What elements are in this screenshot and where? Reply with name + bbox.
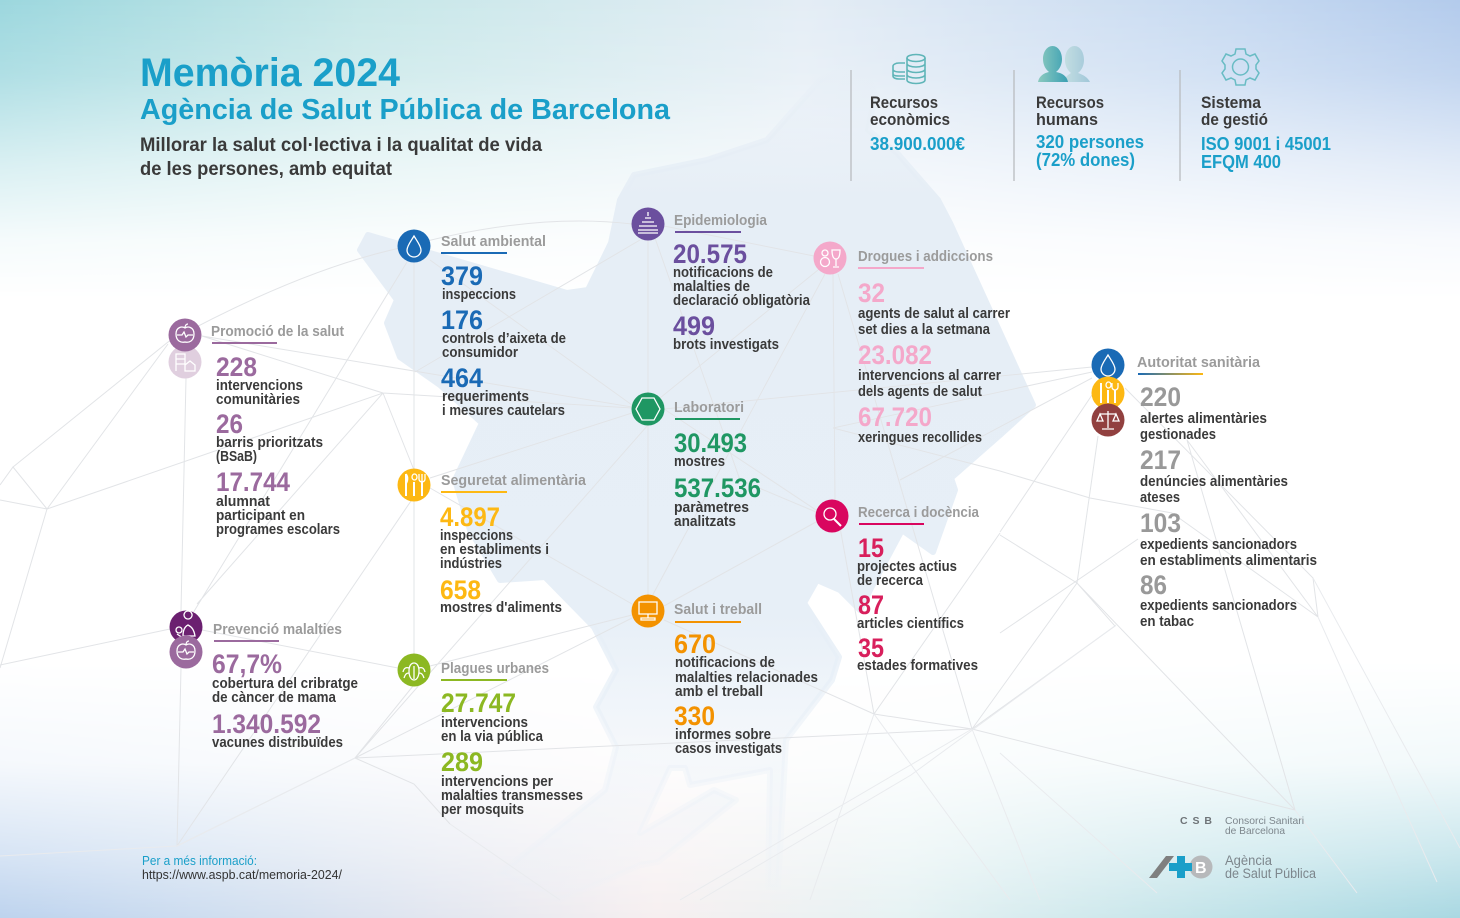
stat: 217: [1140, 445, 1288, 506]
stat: 220: 220: [1140, 382, 1181, 412]
stat: 87: articles científics: [857, 616, 964, 632]
icon: magnifier: [816, 500, 848, 532]
stat: 67.720: 67.720: [858, 402, 932, 432]
stat: 103: en establiments alimentaris: [1140, 553, 1317, 569]
icon: water drop: [398, 230, 430, 262]
mission statement: de les persones, amb equitat: [140, 158, 392, 180]
stat: 289: malalties transmesses: [441, 788, 583, 804]
stat: 23.082: dels agents de salut: [858, 384, 982, 400]
stat: 499: 499: [673, 311, 715, 341]
stat: 658: [440, 575, 562, 616]
panel: Seguretat alimentària: [398, 468, 587, 616]
heading: Recerca i docència: [858, 505, 980, 521]
mission statement: Millorar la salut col·lectiva i la qualitat de vida: [140, 134, 542, 156]
stat: 26: (BSaB): [216, 449, 257, 465]
stat: 289: per mosquits: [441, 802, 524, 818]
stat: 4.897: indústries: [440, 556, 502, 572]
stat: 17.744: 17.744: [216, 467, 290, 497]
heading: Plagues urbanes: [441, 661, 549, 677]
stat: sistema de gestió: de gestió: [1201, 111, 1268, 129]
stat: 32: set dies a la setmana: [858, 322, 991, 338]
logo: Agència de Salut Pública: [1149, 853, 1316, 881]
stat: 15: projectes actius: [857, 559, 957, 575]
heading: Drogues i addiccions: [858, 249, 993, 265]
stat: 537.536: 537.536: [674, 473, 761, 503]
stat: 228: intervencions: [216, 378, 303, 394]
stat: 289: 289: [441, 747, 483, 777]
stat: 1.340.592: 1.340.592: [212, 709, 321, 739]
stat: 289: [441, 747, 583, 818]
stat: 670: malalties relacionades: [675, 670, 818, 686]
stat: 86: expedients sancionadors: [1140, 598, 1297, 614]
stat: 20.575: malalties de: [673, 279, 750, 295]
heading: Autoritat sanitària: [1137, 355, 1261, 371]
stat: 67,7%: [212, 649, 358, 706]
panel: Laboratori: [632, 392, 761, 530]
stat: recursos humans: (72% dones): [1036, 150, 1135, 170]
panel: Salut ambiental: [398, 230, 566, 419]
stat: 330: 330: [674, 701, 715, 731]
more information link: Per a més informació:: [142, 854, 257, 868]
subtitle organisation: Agència de Salut Pública de Barcelona: [140, 94, 671, 126]
stat: 379: inspeccions: [442, 287, 516, 303]
stat: 20.575: 20.575: [673, 239, 747, 269]
stat: 176: controls d’aixeta de: [442, 331, 566, 347]
stat: 464: [441, 363, 565, 419]
stat: recursos econòmics: Recursos: [870, 94, 938, 112]
panel: Promoció de la salut: [168, 318, 344, 538]
icon: coins: [893, 54, 925, 84]
stat: 220: [1140, 382, 1267, 443]
stat: sistema de gestió: EFQM 400: [1201, 152, 1281, 172]
icon: gear: [1222, 49, 1259, 85]
panel: Epidemiologia: [632, 208, 811, 353]
heading: Prevenció malalties: [213, 622, 342, 638]
stat: 220: gestionades: [1140, 427, 1216, 443]
panel: Salut i treball: [632, 594, 818, 757]
stat: 1.340.592: vacunes distribuïdes: [212, 735, 343, 751]
stat: 32: 32: [858, 278, 885, 308]
stat: 537.536: paràmetres: [674, 500, 749, 516]
network lines: [0, 221, 1460, 900]
stat: 27.747: 27.747: [441, 688, 516, 718]
stat: 17.744: programes escolars: [216, 522, 340, 538]
icon: pills and glass: [814, 242, 846, 274]
stat: 67.720: xeringues recollides: [858, 430, 982, 446]
stat: 67.720: [858, 402, 982, 446]
icon: cutlery: [1092, 376, 1124, 410]
stat: recursos humans: [1036, 94, 1144, 170]
heading: Laboratori: [674, 400, 744, 416]
stat: 289: intervencions per: [441, 774, 553, 790]
logo: Agència de Salut Pública: de Salut Pública: [1225, 866, 1316, 881]
icon: computer: [632, 594, 664, 628]
icon: molecule: [632, 392, 664, 426]
logo: Consorci Sanitari de Barcelona: Consorci Sanitari: [1225, 815, 1304, 827]
stat: 27.747: intervencions: [441, 715, 528, 731]
stat: 1.340.592: [212, 709, 343, 751]
logo: Agència de Salut Pública: Agència: [1225, 853, 1272, 868]
heading: Seguretat alimentària: [441, 473, 587, 489]
stat: 17.744: participant en: [216, 508, 305, 524]
stat: 32: agents de salut al carrer: [858, 306, 1010, 322]
icon: mother and child: [170, 610, 202, 644]
stat: 176: [441, 305, 566, 361]
stat: 20.575: [673, 239, 811, 309]
stat: 20.575: notificacions de: [673, 265, 773, 281]
logo: Consorci Sanitari de Barcelona: CSB: [1180, 815, 1212, 827]
stat: 86: en tabac: [1140, 614, 1194, 630]
map of Barcelona: [360, 67, 1033, 900]
title block: [140, 51, 671, 180]
stat: 537.536: analitzats: [674, 514, 736, 530]
stat: 20.575: declaració obligatòria: [673, 293, 811, 309]
stat: 464: requeriments: [442, 389, 529, 405]
stat: 30.493: 30.493: [674, 428, 747, 458]
stat: 330: informes sobre: [675, 727, 771, 743]
panel: Recerca i docència: [816, 500, 980, 674]
stat: 103: expedients sancionadors: [1140, 537, 1297, 553]
stat: recursos humans: humans: [1036, 111, 1098, 129]
stat: 464: 464: [441, 363, 483, 393]
stat: 217: 217: [1140, 445, 1181, 475]
title: Memòria 2024: [140, 51, 401, 95]
stat: 379: [441, 261, 516, 303]
stat: 499: brots investigats: [673, 337, 779, 353]
icon: population pyramid: [632, 208, 664, 240]
stat: 217: denúncies alimentàries: [1140, 474, 1288, 490]
stat: 30.493: mostres: [674, 454, 725, 470]
icon: water drop: [1092, 348, 1124, 382]
stat: sistema de gestió: ISO 9001 i 45001: [1201, 134, 1331, 154]
stat: 67,7%: 67,7%: [212, 649, 282, 679]
mission statement: [140, 134, 542, 180]
stat: 4.897: inspeccions: [440, 528, 513, 544]
stat: 658: mostres d'aliments: [440, 600, 562, 616]
stat: 26: [216, 409, 323, 465]
stat: 670: amb el treball: [675, 684, 763, 700]
stat: 86: 86: [1140, 570, 1167, 600]
stat: 35: [857, 633, 978, 674]
stat: 67,7%: de càncer de mama: [212, 690, 337, 706]
stat: 330: [674, 701, 782, 757]
panel: Plagues urbanes: [398, 654, 583, 818]
stat: recursos econòmics: econòmics: [870, 111, 950, 129]
stat: 228: [216, 352, 303, 408]
stat: 217: ateses: [1140, 490, 1180, 506]
stat: 658: 658: [440, 575, 481, 605]
stat: 670: notificacions de: [675, 655, 775, 671]
stat: 27.747: en la via pública: [441, 729, 544, 745]
stat: 26: 26: [216, 409, 243, 439]
stat: 17.744: [216, 467, 340, 538]
stat: 499: [673, 311, 779, 353]
stat: 220: alertes alimentàries: [1140, 411, 1267, 427]
icon: apple: [170, 636, 202, 668]
stat: 4.897: [440, 502, 549, 572]
panel: header resources: [851, 46, 1331, 181]
stat: 330: casos investigats: [675, 741, 782, 757]
stat: 464: i mesures cautelars: [442, 403, 565, 419]
stat: 35: 35: [858, 633, 884, 663]
logo: Consorci Sanitari de Barcelona: de Barcelona: [1225, 825, 1285, 837]
stat: 670: [674, 629, 818, 700]
stat: 26: barris prioritzats: [216, 435, 323, 451]
heading: Salut ambiental: [441, 234, 546, 250]
stat: 17.744: alumnat: [216, 494, 270, 510]
stat: 15: [857, 533, 957, 589]
stat: 4.897: en establiments i: [440, 542, 549, 558]
stat: 23.082: 23.082: [858, 340, 932, 370]
icon: apple: [168, 318, 202, 352]
heading: Epidemiologia: [674, 213, 768, 229]
stat: 228: comunitàries: [216, 392, 300, 408]
stat: recursos econòmics: 38.900.000€: [870, 134, 965, 154]
stat: sistema de gestió: Sistema: [1201, 94, 1262, 112]
stat: 15: 15: [858, 533, 884, 563]
icon: community: [168, 346, 202, 378]
stat: recursos econòmics: [870, 94, 965, 154]
stat: 35: estades formatives: [857, 658, 978, 674]
stat: 32: [858, 278, 1010, 338]
stat: 537.536: [674, 473, 761, 530]
stat: 86: [1140, 570, 1297, 630]
stat: 176: consumidor: [442, 345, 518, 361]
stat: 87: 87: [858, 590, 884, 620]
stat: 103: 103: [1140, 508, 1181, 538]
stat: 27.747: [441, 688, 544, 745]
stat: 67,7%: cobertura del cribratge: [212, 676, 358, 692]
panel: Drogues i addiccions: [814, 242, 1010, 446]
stat: 176: 176: [441, 305, 483, 335]
stat: 379: 379: [441, 261, 483, 291]
panel: Prevenció malalties: [170, 610, 358, 751]
icon: scales: [1092, 404, 1124, 436]
icon: people: [1038, 46, 1090, 82]
stat: 23.082: [858, 340, 1001, 400]
stat: 30.493: [674, 428, 747, 470]
stat: sistema de gestió: [1201, 94, 1331, 172]
stat: 228: 228: [216, 352, 257, 382]
panel: Autoritat sanitària: [1092, 348, 1317, 630]
icon: cutlery: [398, 468, 430, 502]
stat: 103: [1140, 508, 1317, 569]
stat: 670: 670: [674, 629, 716, 659]
stat: 15: de recerca: [857, 573, 924, 589]
logo: Agència de Salut Pública: B: [1195, 860, 1207, 877]
stat: 23.082: intervencions al carrer: [858, 368, 1001, 384]
stat: 4.897: 4.897: [440, 502, 500, 532]
logo: Consorci Sanitari de Barcelona: [1180, 815, 1304, 837]
heading: Salut i treball: [674, 602, 762, 618]
stat: recursos humans: Recursos: [1036, 94, 1104, 112]
heading: Promoció de la salut: [211, 324, 344, 340]
icon: insect: [398, 654, 430, 686]
more information link: [142, 854, 343, 882]
stat: 87: [857, 590, 964, 632]
more information link: https://www.aspb.cat/memoria-2024/: [142, 868, 343, 882]
stat: recursos humans: 320 persones: [1036, 132, 1144, 152]
